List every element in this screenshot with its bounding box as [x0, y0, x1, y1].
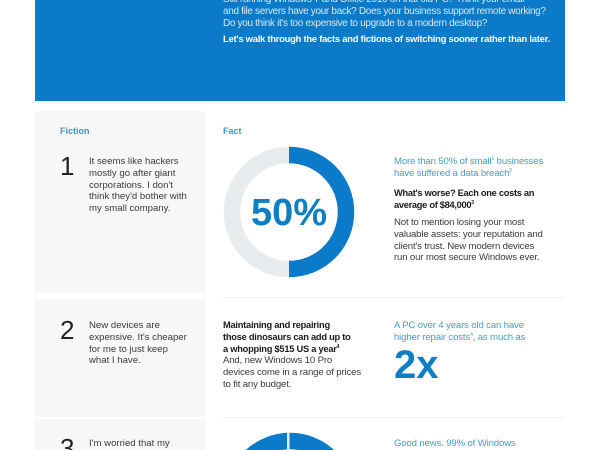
- donut chart: 50%: [224, 146, 354, 278]
- fiction 2 text: what I have.: [89, 355, 141, 366]
- intro text: Do you think it's too expensive to upgrade to a modern desktop?: [223, 18, 487, 29]
- fact 1 body: Not to mention losing your most: [394, 217, 524, 228]
- fiction 3 text: I'm worried that my: [89, 438, 170, 449]
- fact 2 middle text: [223, 320, 361, 390]
- fact 1 body: [394, 217, 543, 263]
- fiction 2 text: for me to just keep: [89, 344, 168, 355]
- fact 1 lead: [394, 156, 543, 179]
- fact 1 body: valuable assets: your reputation and: [394, 229, 543, 240]
- fiction 2 text: [89, 320, 187, 366]
- fact 2 lead: [394, 320, 526, 343]
- fact 2 middle text: And, new Windows 10 Pro: [223, 355, 332, 366]
- heading: fact: Fact: [223, 126, 242, 136]
- fact 2 lead: A PC over 4 years old can have: [394, 320, 524, 331]
- fiction 1 text: mostly go after giant: [89, 168, 175, 179]
- donut chart: 99%: [246, 432, 334, 450]
- fact 2 middle text: a whopping $515 US a year4: [223, 344, 339, 354]
- panel: fiction 1: [35, 111, 205, 293]
- fact 2 middle text: Maintaining and repairing: [223, 320, 330, 330]
- stat: 2x: 2x: [394, 343, 438, 387]
- fact 2 lead: higher repair costs4, as much as: [394, 332, 525, 343]
- donut chart: 50%: 50%: [251, 192, 327, 234]
- fact 2 middle text: those dinosaurs can add up to: [223, 332, 351, 342]
- fact 2 middle text: devices come in a range of prices: [223, 367, 361, 378]
- panel: blue intro header: [35, 0, 565, 101]
- fact 2 middle text: to fit any budget.: [223, 379, 291, 390]
- fact 3 lead: Good news. 99% of Windows: [394, 438, 516, 449]
- intro text: [223, 0, 546, 29]
- heading: fiction: Fiction: [60, 126, 90, 136]
- number 1: 1: [60, 151, 74, 181]
- fact 1 bold: What's worse? Each one costs an: [394, 188, 534, 198]
- panel: fiction 3: [35, 419, 205, 450]
- number 2: 2: [60, 315, 74, 345]
- intro text: and file servers have your back? Does your business support remote working?: [223, 6, 546, 17]
- fiction 2 text: expensive. It's cheaper: [89, 332, 187, 343]
- fact 1 bold: average of $84,0003: [394, 200, 474, 210]
- fact 1 body: client's trust. New modern devices: [394, 241, 534, 252]
- fiction 1 text: It seems like hackers: [89, 156, 179, 167]
- fact 1 lead: More than 50% of small1 businesses: [394, 156, 543, 167]
- fiction 1 text: [89, 156, 187, 214]
- panel: fiction 2: [35, 299, 205, 417]
- fiction 1 text: think they'd bother with: [89, 191, 187, 202]
- fiction 1 text: my small company.: [89, 203, 170, 214]
- fact 1 bold: [394, 188, 534, 210]
- fact 1 lead: have suffered a data breach2: [394, 168, 512, 179]
- intro bold statement: Let's walk through the facts and fictions of switching sooner rather than later.: [223, 33, 550, 44]
- fiction 1 text: corporations. I don't: [89, 180, 173, 191]
- fact 1 body: run our most secure Windows ever.: [394, 252, 539, 263]
- fiction 2 text: New devices are: [89, 320, 160, 331]
